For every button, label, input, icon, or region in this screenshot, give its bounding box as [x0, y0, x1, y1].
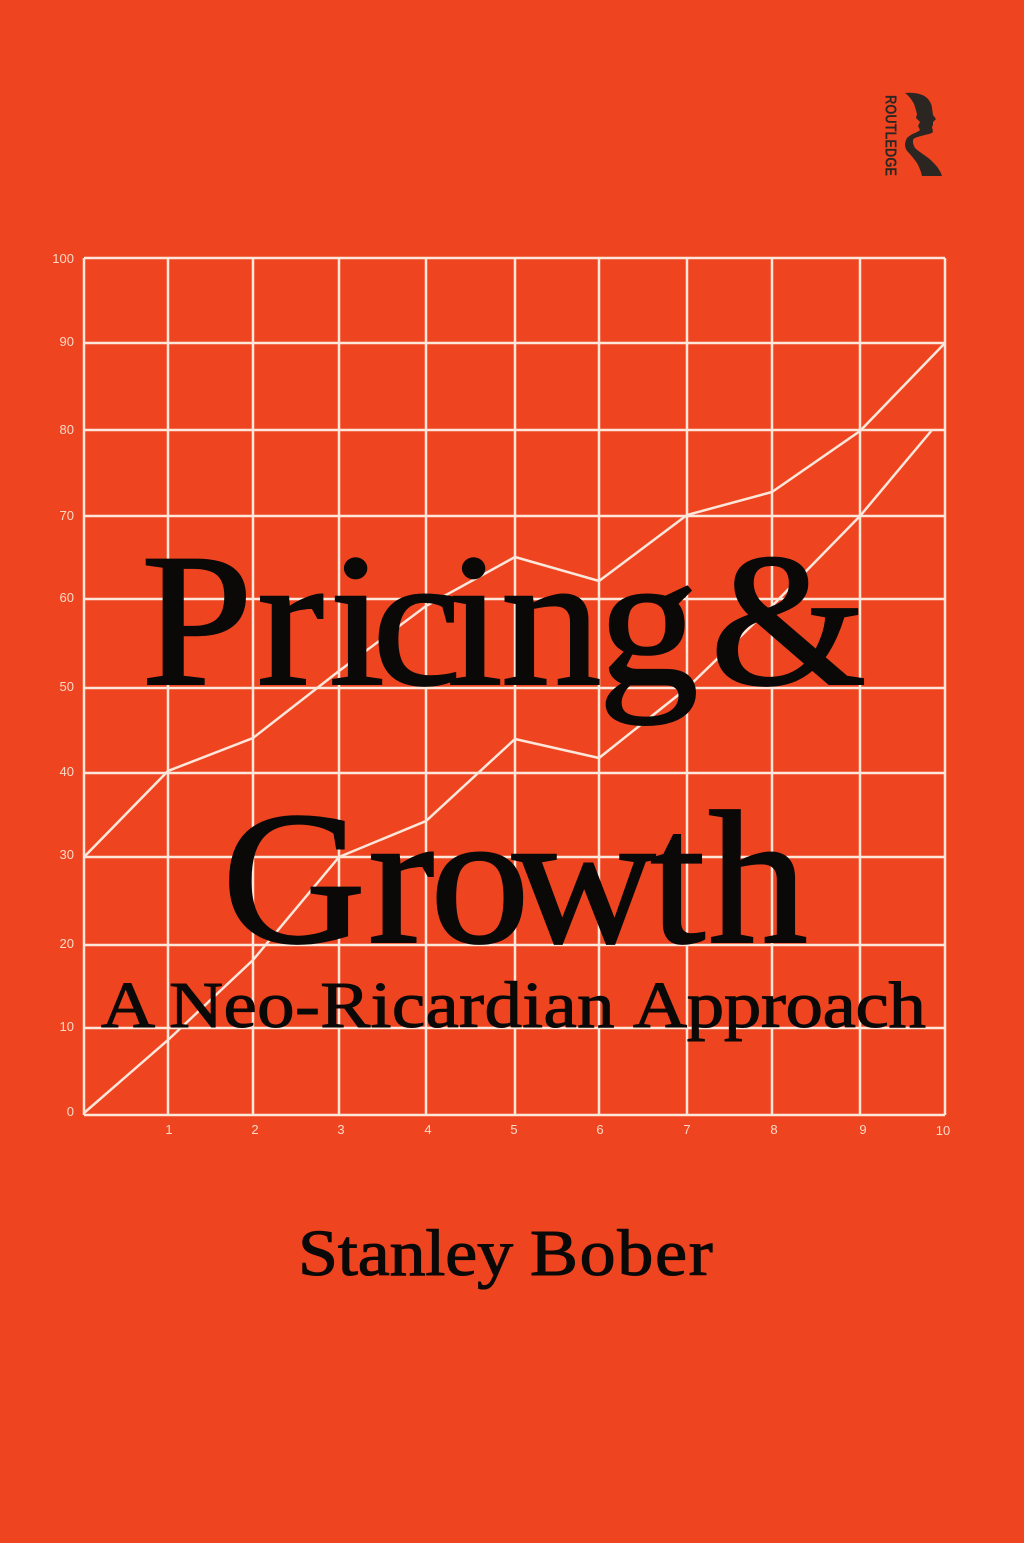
- publisher logo: Routledge: ROUTLEDGE: [882, 95, 898, 176]
- y axis labels: 80: [60, 422, 74, 437]
- x axis labels: 6: [596, 1122, 604, 1137]
- grid lines: [84, 258, 945, 1115]
- title: Growth: [222, 773, 808, 984]
- lower data line: [84, 430, 932, 1113]
- x axis labels: 2: [251, 1122, 259, 1137]
- y axis labels: 30: [60, 847, 74, 862]
- title: [141, 516, 867, 984]
- y axis labels: 0: [67, 1104, 74, 1119]
- subtitle: A: [101, 969, 155, 1042]
- publisher logo: Routledge: [882, 93, 942, 176]
- subtitle: Approach: [633, 969, 926, 1042]
- x axis labels: 3: [337, 1122, 345, 1137]
- y axis labels: 50: [60, 679, 74, 694]
- x axis labels: 8: [770, 1122, 778, 1137]
- author: Bober: [530, 1216, 714, 1289]
- line chart: [52, 251, 950, 1138]
- y axis labels: 10: [60, 1019, 74, 1034]
- x axis labels: 9: [859, 1122, 867, 1137]
- y axis labels: [52, 251, 74, 1119]
- y axis labels: 70: [60, 508, 74, 523]
- x axis labels: 4: [424, 1122, 432, 1137]
- x axis labels: 1: [165, 1122, 173, 1137]
- y axis labels: 40: [60, 764, 74, 779]
- subtitle: Neo-Ricardian: [169, 969, 615, 1042]
- x axis labels: [165, 1122, 950, 1138]
- upper data line: [84, 343, 945, 857]
- author: Stanley: [298, 1216, 514, 1289]
- y axis labels: 90: [60, 334, 74, 349]
- y axis labels: 100: [52, 251, 74, 266]
- title: Pricing &: [141, 516, 867, 726]
- x axis labels: 10: [936, 1123, 950, 1138]
- x axis labels: 5: [510, 1122, 518, 1137]
- x axis labels: 7: [683, 1122, 691, 1137]
- y axis labels: 20: [60, 936, 74, 951]
- y axis labels: 60: [60, 590, 74, 605]
